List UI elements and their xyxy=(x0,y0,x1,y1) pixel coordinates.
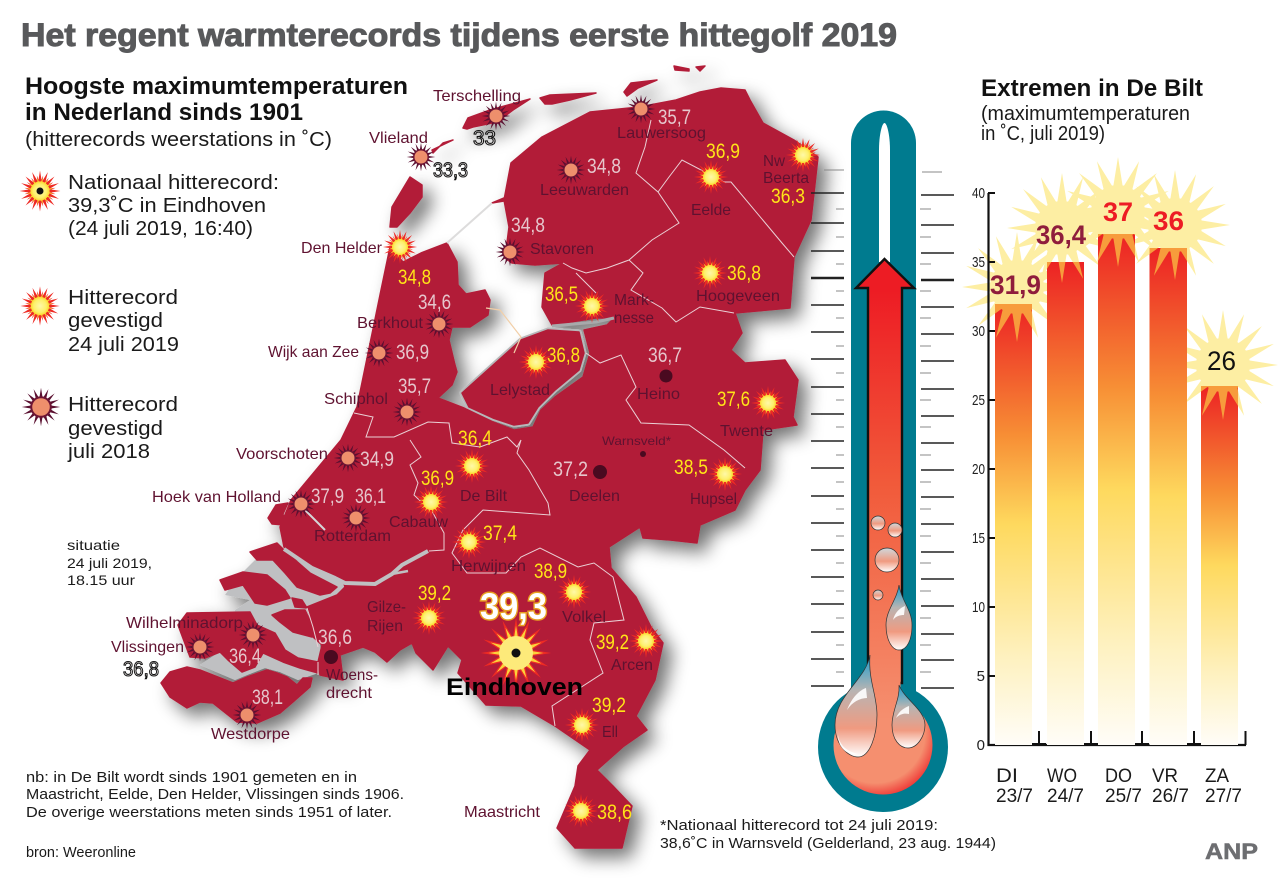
legend: national record: (24 juli 2019, 16:40) xyxy=(68,218,253,240)
station: De Bilt: De Bilt xyxy=(460,488,508,505)
station: Rotterdam xyxy=(314,485,391,545)
bar chart xyxy=(962,157,1278,807)
station: Woensdrecht: Woens- xyxy=(326,667,378,684)
day labels: 25/7 xyxy=(1105,786,1142,807)
sun overlaps on bars xyxy=(995,234,1238,420)
legend: record 24 juli 2019 xyxy=(20,286,179,356)
station: Den Helder xyxy=(301,230,431,289)
station: Hoek van Holland xyxy=(152,485,344,518)
legend: national record: Nationaal hitterecord: xyxy=(68,172,279,194)
thermometer body xyxy=(818,110,948,812)
station: Hupsel: Hupsel xyxy=(690,491,737,508)
station: Volkel: Volkel xyxy=(562,609,606,626)
station: Hoogeveen: 36,8 xyxy=(727,262,761,285)
station: Rotterdam: Rotterdam xyxy=(314,528,391,545)
station: Eindhoven national record: 39,3 xyxy=(480,586,547,627)
station: Hoogeveen xyxy=(693,256,780,305)
red arrow column xyxy=(856,259,914,683)
footnote: 38,6˚C in Warnsveld (Gelderland, 23 aug. 1944) xyxy=(660,835,996,852)
station: De Bilt xyxy=(455,427,508,505)
y axis: 0 xyxy=(977,737,985,754)
measurement note: Maastricht, Eelde, Den Helder, Vlissingen sinds 1906. xyxy=(26,786,404,803)
station: Lelystad xyxy=(490,344,580,399)
station: Ell xyxy=(565,694,626,742)
station: Deelen: 37,2 xyxy=(553,458,588,481)
y axis: 15 xyxy=(972,530,985,547)
day labels xyxy=(996,766,1242,807)
station: Terschelling: Terschelling xyxy=(433,88,521,105)
station: Rotterdam: 36,1 xyxy=(355,485,386,508)
bubbles and drops xyxy=(835,516,925,757)
y axis xyxy=(972,185,1246,754)
thermometer scale ticks xyxy=(811,170,954,688)
source: bron: Weeronline xyxy=(26,844,136,861)
station: Vlieland: Vlieland xyxy=(369,130,428,147)
bar values: 37 xyxy=(1103,197,1133,227)
bar values: 36 xyxy=(1153,206,1184,236)
y axis: 40 xyxy=(972,185,985,202)
station: Eelde: Eelde xyxy=(691,202,731,219)
station: Herwijnen: 37,4 xyxy=(483,522,517,545)
bar values xyxy=(990,197,1236,376)
station: Volkel: 38,9 xyxy=(534,560,567,583)
station: Vlissingen: Vlissingen xyxy=(111,639,184,656)
station: Vlissingen xyxy=(111,633,214,681)
station: Ell: 39,2 xyxy=(592,694,626,717)
measurement note: De overige weerstations meten sinds 1951 of later. xyxy=(26,804,392,821)
map heading: Hoogste maximumtemperaturen xyxy=(25,73,408,100)
station: Warnsveld: Warnsveld* xyxy=(602,434,671,448)
station: Berkhout xyxy=(357,291,453,338)
footnote xyxy=(660,817,996,852)
station: Berkhout: Berkhout xyxy=(357,315,424,332)
station: Leeuwarden: 34,8 xyxy=(587,155,621,178)
legend: record juli 2018 xyxy=(22,388,178,463)
station: Woensdrecht xyxy=(318,626,378,702)
station: Stavoren xyxy=(496,214,594,266)
station: Deelen xyxy=(553,458,620,505)
station: Den Helder: 34,8 xyxy=(398,266,431,289)
station: Wilhelminadorp xyxy=(126,615,267,668)
station: Schiphol: Schiphol xyxy=(324,391,388,408)
day labels: 24/7 xyxy=(1047,786,1084,807)
station: Stavoren: 34,8 xyxy=(511,214,545,237)
chart heading xyxy=(981,75,1203,145)
bars xyxy=(995,234,1238,745)
day labels: DI xyxy=(996,766,1018,787)
station: Hupsel xyxy=(674,456,742,508)
station: Woensdrecht: drecht xyxy=(326,685,373,702)
station: Nw Beerta xyxy=(763,138,820,208)
station: Vlieland xyxy=(369,130,468,182)
map heading: in Nederland sinds 1901 xyxy=(25,99,303,126)
station: Hoek van Holland: 37,9 xyxy=(311,485,344,508)
y axis: 5 xyxy=(977,668,985,685)
map of the Netherlands xyxy=(111,66,820,848)
day labels: VR xyxy=(1152,766,1178,787)
station: Heino xyxy=(637,344,682,403)
legend: record 24 juli 2019: Hitterecord xyxy=(68,287,178,309)
day labels: 23/7 xyxy=(996,786,1033,807)
chart heading: in ˚C, juli 2019) xyxy=(981,123,1105,145)
station: Stavoren: Stavoren xyxy=(530,241,594,258)
station: Lelystad: Lelystad xyxy=(490,382,550,399)
station: Lauwersoog xyxy=(617,95,706,142)
station: Marknesse: Mark- xyxy=(614,292,654,309)
situation note xyxy=(67,537,152,588)
station: Gilze-Rijen xyxy=(367,582,451,635)
legend: record juli 2018: Hitterecord xyxy=(68,394,178,416)
chart heading: Extremen in De Bilt xyxy=(981,75,1203,102)
day labels: ZA xyxy=(1205,766,1229,787)
station: Gilze-Rijen: Gilze- xyxy=(367,599,406,616)
station: Arcen xyxy=(596,624,663,674)
situation note: 24 juli 2019, xyxy=(67,555,152,571)
station: Wilhelminadorp: Wilhelminadorp xyxy=(126,615,243,632)
map heading: (hitterecords weerstations in ˚C) xyxy=(25,129,332,151)
station: Lauwersoog: 35,7 xyxy=(658,106,691,129)
station: Hoek van Holland: Hoek van Holland xyxy=(152,489,281,506)
station: Voorschoten xyxy=(236,444,394,472)
title: Het regent warmterecords tijdens eerste hittegolf 2019 xyxy=(21,17,897,53)
station: Eindhoven national record xyxy=(446,586,583,701)
station: Hoogeveen: Hoogeveen xyxy=(696,288,780,305)
y axis: 30 xyxy=(972,323,985,340)
station: Gilze-Rijen: 39,2 xyxy=(418,582,451,605)
legend: record 24 juli 2019: 24 juli 2019 xyxy=(68,334,179,356)
legend: record 24 juli 2019: gevestigd xyxy=(68,310,163,332)
station: Westdorpe: Westdorpe xyxy=(211,726,290,743)
day labels: WO xyxy=(1047,766,1077,787)
station: Cabauw xyxy=(389,467,454,531)
station: Vlissingen: 36,8 xyxy=(123,658,159,681)
station: Woensdrecht: 36,6 xyxy=(318,626,352,649)
station: Nw Beerta: Nw xyxy=(763,153,785,170)
legend: record juli 2018: juli 2018 xyxy=(67,441,150,463)
footnote: *Nationaal hitterecord tot 24 juli 2019: xyxy=(660,817,938,834)
station: Wijk aan Zee xyxy=(268,339,429,367)
station: Marknesse: 36,5 xyxy=(545,283,578,306)
water strips and dikes xyxy=(284,203,614,584)
station: Eelde: 36,9 xyxy=(706,140,740,163)
station: Terschelling xyxy=(433,88,521,150)
station: Leeuwarden xyxy=(540,155,629,199)
y axis: 35 xyxy=(972,254,985,271)
station: Vlieland: 33,3 xyxy=(433,159,468,182)
station: Den Helder: Den Helder xyxy=(301,240,383,257)
station: Eelde xyxy=(691,140,740,219)
province borders xyxy=(307,120,794,726)
station: Schiphol xyxy=(324,375,431,426)
station: Nw Beerta: 36,3 xyxy=(771,185,805,208)
station: Hupsel: 38,5 xyxy=(674,456,708,479)
station: Wijk aan Zee: Wijk aan Zee xyxy=(268,344,359,361)
station: Twente: Twente xyxy=(720,423,773,440)
station: Volkel xyxy=(534,560,606,626)
y axis: 10 xyxy=(972,599,985,616)
station: Westdorpe: 38,1 xyxy=(252,686,283,709)
station: Wilhelminadorp: 36,4 xyxy=(229,645,261,668)
station: Wijk aan Zee: 36,9 xyxy=(396,341,429,364)
bar values: 31,9 xyxy=(990,270,1041,300)
day labels: 27/7 xyxy=(1205,786,1242,807)
station: Warnsveld xyxy=(602,434,671,457)
station: Gilze-Rijen: Rijen xyxy=(367,618,403,635)
y axis: 20 xyxy=(972,461,985,478)
legend xyxy=(20,171,279,463)
station: Twente: 37,6 xyxy=(717,388,750,411)
station: Herwijnen: Herwijnen xyxy=(451,558,526,575)
station: Nw Beerta: Beerta xyxy=(763,170,809,187)
thermometer xyxy=(811,110,954,812)
station: Twente xyxy=(717,386,785,440)
station: Heino: 36,7 xyxy=(648,344,682,367)
legend: national record xyxy=(20,171,279,240)
y axis: 25 xyxy=(972,392,985,409)
station: Arcen: 39,2 xyxy=(596,631,629,654)
station: Maastricht xyxy=(464,794,632,828)
station: Cabauw: 36,9 xyxy=(421,467,454,490)
station: Arcen: Arcen xyxy=(611,657,653,674)
measurement note: nb: in De Bilt wordt sinds 1901 gemeten en in xyxy=(26,769,357,786)
ANP logo: ANP xyxy=(1205,839,1258,864)
sun bursts behind bars xyxy=(962,157,1278,420)
station: Schiphol: 35,7 xyxy=(398,375,431,398)
station: Cabauw: Cabauw xyxy=(389,514,448,531)
station: Leeuwarden: Leeuwarden xyxy=(540,182,629,199)
x axis ticks xyxy=(1032,731,1246,745)
station: Westdorpe xyxy=(211,686,290,743)
station: Herwijnen xyxy=(451,522,526,575)
station: Voorschoten: 34,9 xyxy=(360,448,394,471)
station: Berkhout: 34,6 xyxy=(418,291,451,314)
bar values: 36,4 xyxy=(1036,220,1086,250)
chart heading: (maximumtemperaturen xyxy=(981,103,1190,125)
station: Eindhoven national record: Eindhoven xyxy=(446,674,583,701)
map heading xyxy=(25,73,408,151)
day labels: DO xyxy=(1105,766,1132,787)
station: Maastricht: 38,6 xyxy=(597,801,632,824)
station: Deelen: Deelen xyxy=(569,488,620,505)
station: Lauwersoog: Lauwersoog xyxy=(617,125,706,142)
situation note: situatie xyxy=(67,537,120,553)
measurement note xyxy=(26,769,404,821)
legend: national record: 39,3˚C in Eindhoven xyxy=(68,195,266,217)
station: Maastricht: Maastricht xyxy=(464,804,541,821)
day labels: 26/7 xyxy=(1152,786,1189,807)
station: Marknesse xyxy=(545,283,654,327)
situation note: 18.15 uur xyxy=(67,572,135,588)
station: De Bilt: 36,4 xyxy=(458,427,492,450)
legend: record juli 2018: gevestigd xyxy=(68,418,163,440)
station: Heino: Heino xyxy=(637,386,680,403)
station: Ell: Ell xyxy=(602,724,618,741)
land shapes xyxy=(161,66,818,848)
station: Terschelling: 33 xyxy=(473,127,496,150)
station: Marknesse: nesse xyxy=(614,310,654,327)
station: Lelystad: 36,8 xyxy=(547,344,580,367)
station: Voorschoten: Voorschoten xyxy=(236,446,328,463)
bar values: 26 xyxy=(1207,346,1236,376)
